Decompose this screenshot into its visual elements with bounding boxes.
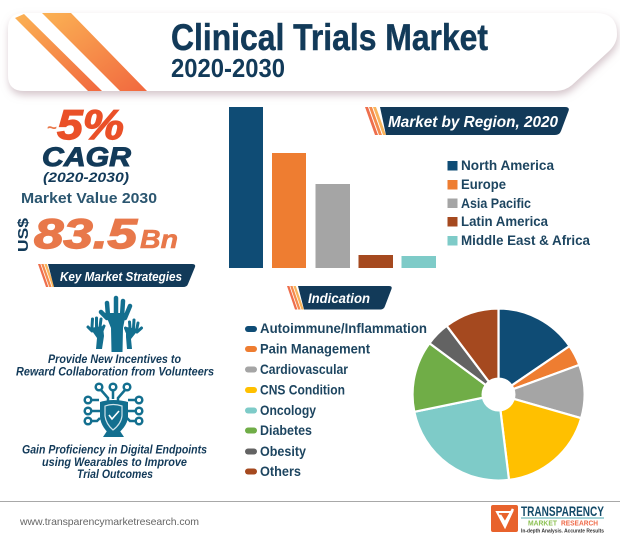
market value figure: 83.5 xyxy=(34,210,138,257)
heading: key market strategies xyxy=(38,264,195,287)
legend: regions: Latin America xyxy=(461,213,548,229)
icon: raised hands xyxy=(88,298,142,352)
text: strategy two: Gain Proficiency in Digital Endpoints xyxy=(22,444,207,456)
market value figure xyxy=(15,210,178,257)
legend: indications: Diabetes xyxy=(260,422,312,438)
title: Clinical Trials Market xyxy=(171,17,488,58)
logo: In-depth Analysis. Accurate Results xyxy=(521,528,604,534)
legend: indications xyxy=(245,320,427,479)
heading: indication xyxy=(287,286,392,310)
heading: market by region xyxy=(365,107,569,135)
pie chart: indication xyxy=(413,308,585,481)
legend: regions: North America xyxy=(461,157,554,173)
legend: indications: Cardiovascular xyxy=(260,361,348,377)
legend: indications: CNS Condition xyxy=(260,382,345,398)
text: strategy two: using Wearables to Improve xyxy=(42,457,188,469)
header banner xyxy=(8,13,617,91)
logo xyxy=(491,503,604,534)
CAGR stat xyxy=(42,101,132,185)
text: strategy one: Provide New Incentives to xyxy=(48,354,181,366)
legend: indications: Pain Management xyxy=(260,340,370,356)
footer url: www.transparencymarketresearch.com xyxy=(19,516,199,528)
logo: MARKET xyxy=(528,520,558,528)
icon: centre hand xyxy=(101,298,130,352)
CAGR stat: 5% xyxy=(57,101,124,148)
logo: RESEARCH xyxy=(561,520,598,528)
legend: regions: Middle East & Africa xyxy=(461,232,590,248)
icon: left hand xyxy=(88,318,104,349)
CAGR stat: ~ xyxy=(47,118,57,137)
legend: regions: Asia Pacific xyxy=(461,195,531,211)
title: 2020-2030 xyxy=(171,53,285,83)
icon: logo mark xyxy=(491,505,518,532)
bar chart: market by region xyxy=(229,107,436,268)
heading: key market strategies: Key Market Strategies xyxy=(60,269,182,284)
heading: market by region: Market by Region, 2020 xyxy=(388,114,558,131)
text: strategy two xyxy=(22,444,207,481)
market value label: Market Value 2030 xyxy=(21,190,157,207)
text: strategy one: Reward Collaboration from Volunteers xyxy=(16,366,214,378)
title xyxy=(171,17,488,83)
icon: header stripes xyxy=(15,13,147,91)
market value figure: US$ xyxy=(15,217,32,252)
CAGR stat: (2020-2030) xyxy=(43,170,130,185)
icon: digital shield xyxy=(85,384,142,437)
legend: regions xyxy=(448,157,590,248)
text: strategy one xyxy=(16,354,214,378)
legend: regions: Europe xyxy=(461,176,506,192)
CAGR stat: CAGR xyxy=(42,142,132,172)
text: strategy two: Trial Outcomes xyxy=(77,469,153,481)
heading: indication: Indication xyxy=(308,290,370,306)
icon: right hand xyxy=(126,320,142,349)
legend: indications: Autoimmune/Inflammation xyxy=(260,320,427,336)
legend: indications: Oncology xyxy=(260,402,316,418)
legend: indications: Others xyxy=(260,463,301,479)
market value figure: Bn xyxy=(140,224,178,254)
legend: indications: Obesity xyxy=(260,443,306,459)
